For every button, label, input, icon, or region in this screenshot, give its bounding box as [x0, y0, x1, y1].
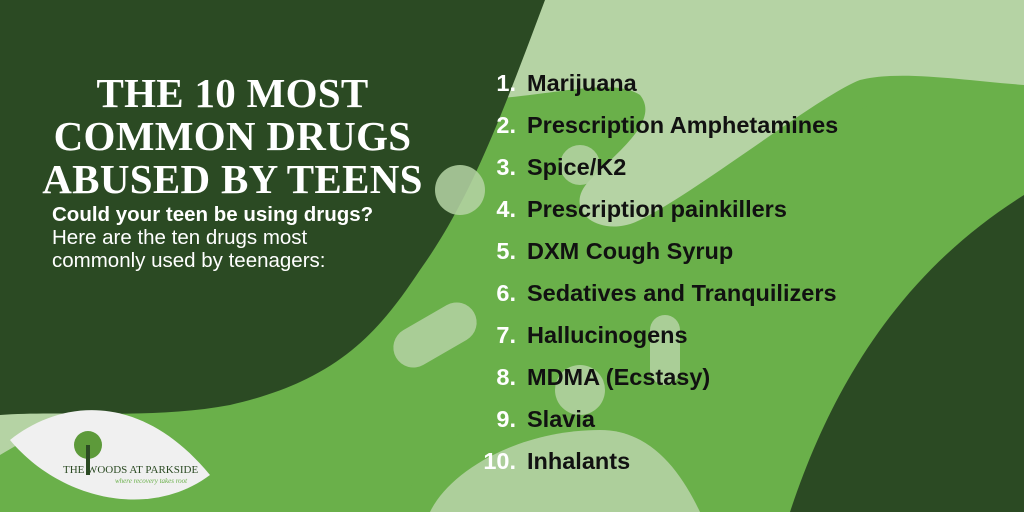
subtitle: [52, 203, 373, 272]
drug list: Slavia: [527, 406, 595, 432]
subtitle: Here are the ten drugs most: [52, 226, 307, 249]
drug list: 5.: [496, 238, 516, 264]
title: COMMON DRUGS: [54, 113, 411, 159]
drug list: 10.: [483, 448, 516, 474]
drug list: 7.: [496, 322, 516, 348]
logo leaf: [10, 410, 210, 500]
drug list: 4.: [496, 196, 516, 222]
drug list: 9.: [496, 406, 516, 432]
drug list: 8.: [496, 364, 516, 390]
drug list: Spice/K2: [527, 154, 626, 180]
subtitle: Could your teen be using drugs?: [52, 203, 373, 226]
drug list: MDMA (Ecstasy): [527, 364, 710, 390]
subtitle: commonly used by teenagers:: [52, 249, 325, 272]
title: THE 10 MOST: [96, 70, 369, 116]
drug list: 2.: [496, 112, 516, 138]
drug list: Marijuana: [527, 70, 637, 96]
logo leaf: where recovery takes root: [115, 477, 188, 485]
drug list: 1.: [496, 70, 516, 96]
drug list: [483, 70, 838, 474]
drug list: 6.: [496, 280, 516, 306]
drug list: Sedatives and Tranquilizers: [527, 280, 837, 306]
drug list: Prescription painkillers: [527, 196, 787, 222]
drug list: DXM Cough Syrup: [527, 238, 733, 264]
drug list: Hallucinogens: [527, 322, 688, 348]
title: [42, 70, 423, 202]
drug list: Prescription Amphetamines: [527, 112, 838, 138]
title: ABUSED BY TEENS: [42, 156, 423, 202]
drug list: Inhalants: [527, 448, 630, 474]
drug list: 3.: [496, 154, 516, 180]
logo text: THE WOODS AT PARKSIDE: [63, 464, 198, 476]
logo tree icon: [74, 431, 102, 475]
